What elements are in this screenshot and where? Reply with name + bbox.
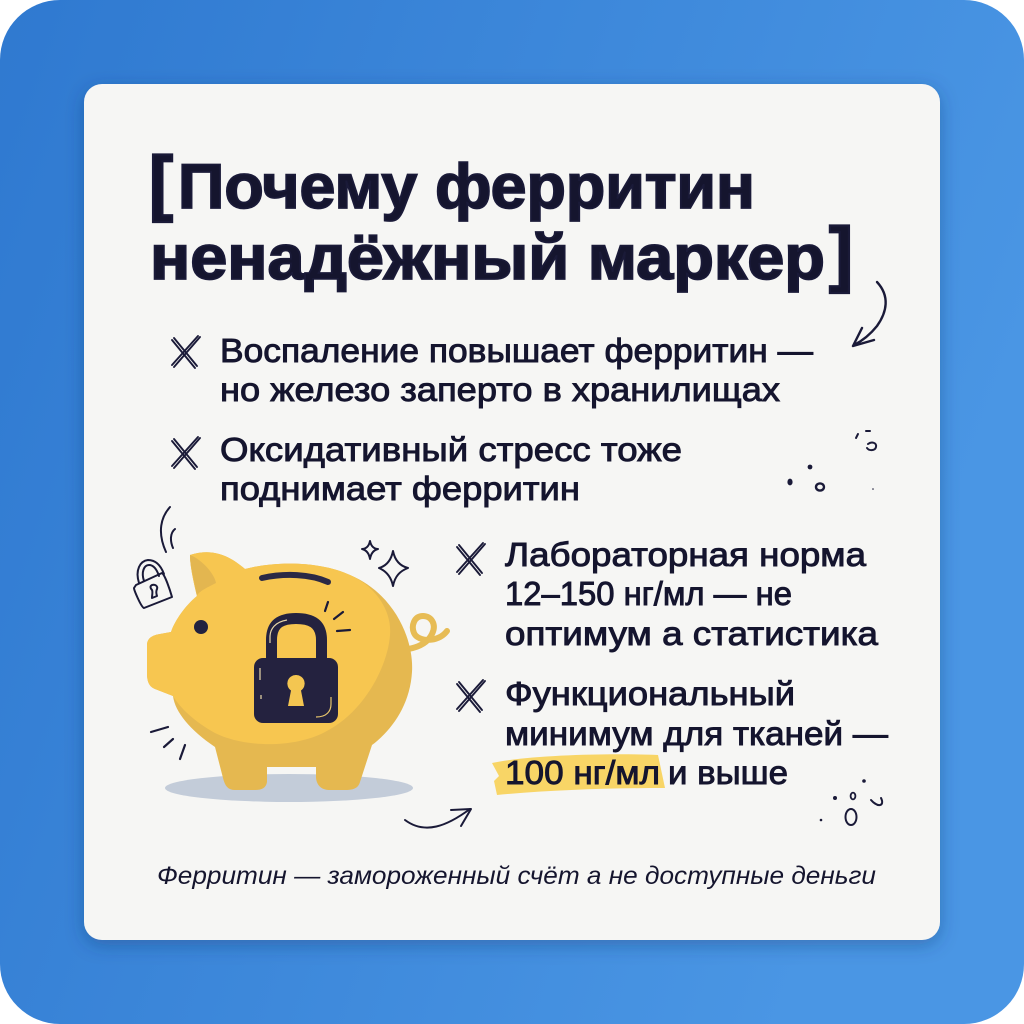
text: functional minimum: и выше [668,754,788,791]
text: oxidative stress [220,431,682,507]
body front light [147,552,390,744]
bullet: inflammation [172,332,813,408]
highlight marker [492,754,665,795]
arrow: curved down to first bullet [853,282,886,346]
text: inflammation: но железо заперто в хранилищах [220,371,781,408]
illustration: piggy bank [147,552,447,802]
text: lab norm [505,536,879,652]
doodle: motion lines left of pig [151,727,185,759]
bullet: lab norm [457,536,879,652]
text: functional minimum: минимум для тканей — [505,715,888,752]
title [149,143,853,294]
doodle: small padlock [134,560,172,608]
shine marks on lock [325,602,350,631]
ear inner [190,555,216,596]
text: lab norm: Лабораторная норма [505,536,867,573]
doodle: dots lower right [820,779,882,825]
text: lab norm: 12–150 нг/мл — не [505,575,792,612]
icon: cross [457,543,485,575]
text: inflammation: Воспаление повышает ферритин — [220,332,813,369]
text: lab norm: оптимум а статистика [505,615,879,652]
bullet: oxidative stress [172,431,682,507]
eye [194,620,208,634]
title: Почему ферритин [178,152,755,222]
tail [408,616,447,649]
doodle: sparkles [362,541,408,586]
card panel [84,84,940,940]
text: functional minimum [505,675,888,791]
shadow ellipse [165,774,413,802]
padlock icon [254,618,338,723]
text: functional minimum: Функциональный [505,675,795,712]
text: functional minimum: 100 нг/мл [505,754,660,791]
title: ] [829,214,853,294]
text: oxidative stress: Оксидативный стресс тоже [220,431,682,468]
footer caption: Ферритин — замороженный счёт а не доступные деньги [157,862,876,890]
doodle: dots upper right [787,431,876,491]
icon: cross [457,680,485,712]
coin slot [262,575,328,582]
text: oxidative stress: поднимает ферритин [220,470,580,507]
text: inflammation [220,332,813,408]
doodle: motion curves above padlock [161,507,175,552]
title: ненадёжный маркер [150,223,825,293]
arrow: pointing up right [405,809,471,828]
icon: cross [172,437,200,469]
bullet: functional minimum [457,675,888,795]
body shade [147,552,412,790]
icon: cross [172,336,200,368]
title: [ [149,143,173,223]
